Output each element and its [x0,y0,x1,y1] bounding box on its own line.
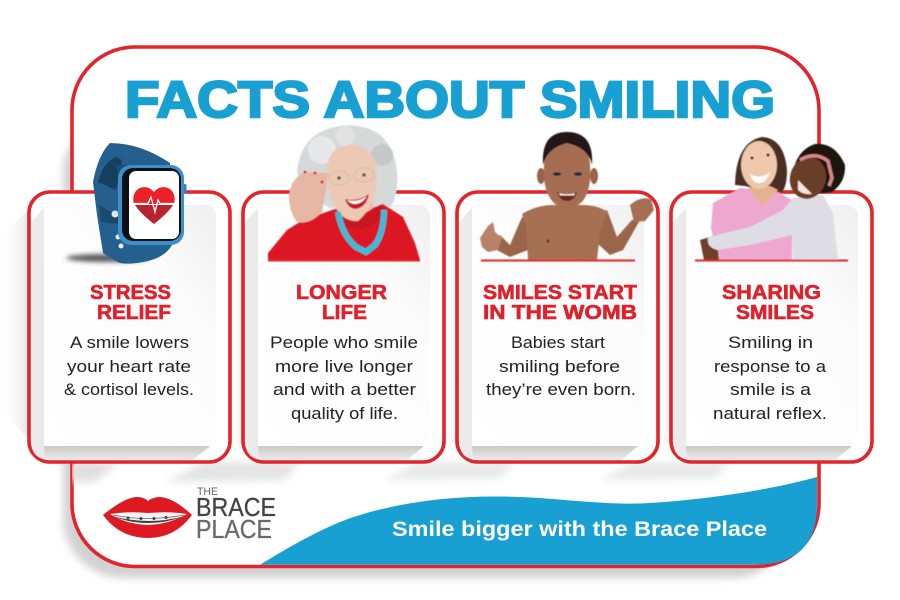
gray shirt and arm [708,195,838,260]
neck [338,195,373,215]
sweater [268,204,420,260]
icon: lips with braces [103,497,192,538]
text: womb body: Babies start [511,333,605,352]
text: sharing smiles body: natural reflex. [713,404,827,423]
text: longer life body: quality of life. [291,404,398,423]
text: stress relief body: A smile lowers [70,333,189,352]
text: womb body: smiling before [499,357,620,376]
logo wordmark: THE [197,486,218,498]
smile [345,194,369,209]
divider [695,260,848,262]
heading: stress relief [90,282,171,324]
text: womb body [486,333,636,399]
face [327,145,377,221]
text: stress relief body: your heart rate [67,357,191,376]
photo: two women hugging [695,137,848,262]
panel: smiles start in the womb card [446,192,658,462]
head [537,168,545,184]
brown hair [735,137,787,192]
panel: sharing smiles card [660,192,872,462]
hands [480,222,502,252]
text: stress relief body [64,333,194,399]
headband [800,156,832,186]
heading: sharing smiles: SHARING [722,282,821,304]
face 2 [785,153,831,203]
arms [493,217,540,257]
divider [268,260,420,262]
glasses [329,168,374,185]
pink shirt [711,188,792,260]
text: footer tagline: Smile bigger with the Brace Place [392,518,767,541]
hair [297,125,397,208]
heading: stress relief: RELIEF [97,302,171,324]
heading: longer life: LIFE [322,302,367,324]
heading: sharing smiles: SMILES [736,302,814,324]
heading: smiles start in the womb: IN THE WOMB [483,302,637,324]
torso [522,205,607,260]
panel: longer life card [232,192,444,462]
text: womb body: they’re even born. [486,380,636,399]
hand [289,172,328,223]
panel: footer wave [258,477,817,566]
necklace [338,210,384,252]
eyes and smile [553,172,561,176]
heading: longer life [296,282,388,324]
heading: smiles start in the womb: SMILES START [483,282,637,304]
text: sharing smiles body [713,333,827,423]
panel: main frame [72,47,819,566]
panel: stress relief card [0,192,230,462]
logo wordmark [196,486,276,544]
icon: watch screen [129,171,179,239]
text: longer life body: and with a better [273,380,416,399]
heading: smiles start in the womb [483,282,637,324]
text: sharing smiles body: Smiling in [728,333,813,352]
text: sharing smiles body: response to a [714,357,827,376]
text: longer life body [270,333,418,423]
heading: sharing smiles [722,282,821,324]
divider [481,260,635,262]
text: stress relief body: & cortisol levels. [64,380,194,399]
icon: smartwatch with heart [66,143,186,264]
panel: main frame shadow [63,114,793,578]
heading: longer life: LONGER [296,282,388,304]
text: sharing smiles body: smile is a [730,380,812,399]
heading: stress relief: STRESS [90,282,171,304]
dark curly hair [793,144,845,194]
logo: The Brace Place [103,486,276,544]
title: FACTS ABOUT SMILING [125,71,775,128]
text: longer life body: more live longer [275,357,413,376]
text: longer life body: People who smile [270,333,418,352]
photo: smiling older woman in red [268,125,420,262]
panel: shadows beneath cards [70,462,730,482]
photo: smiling baby [480,132,654,262]
hand [700,235,719,260]
logo wordmark: BRACE [196,492,276,522]
face 1 [741,141,777,189]
logo wordmark: PLACE [196,514,272,544]
